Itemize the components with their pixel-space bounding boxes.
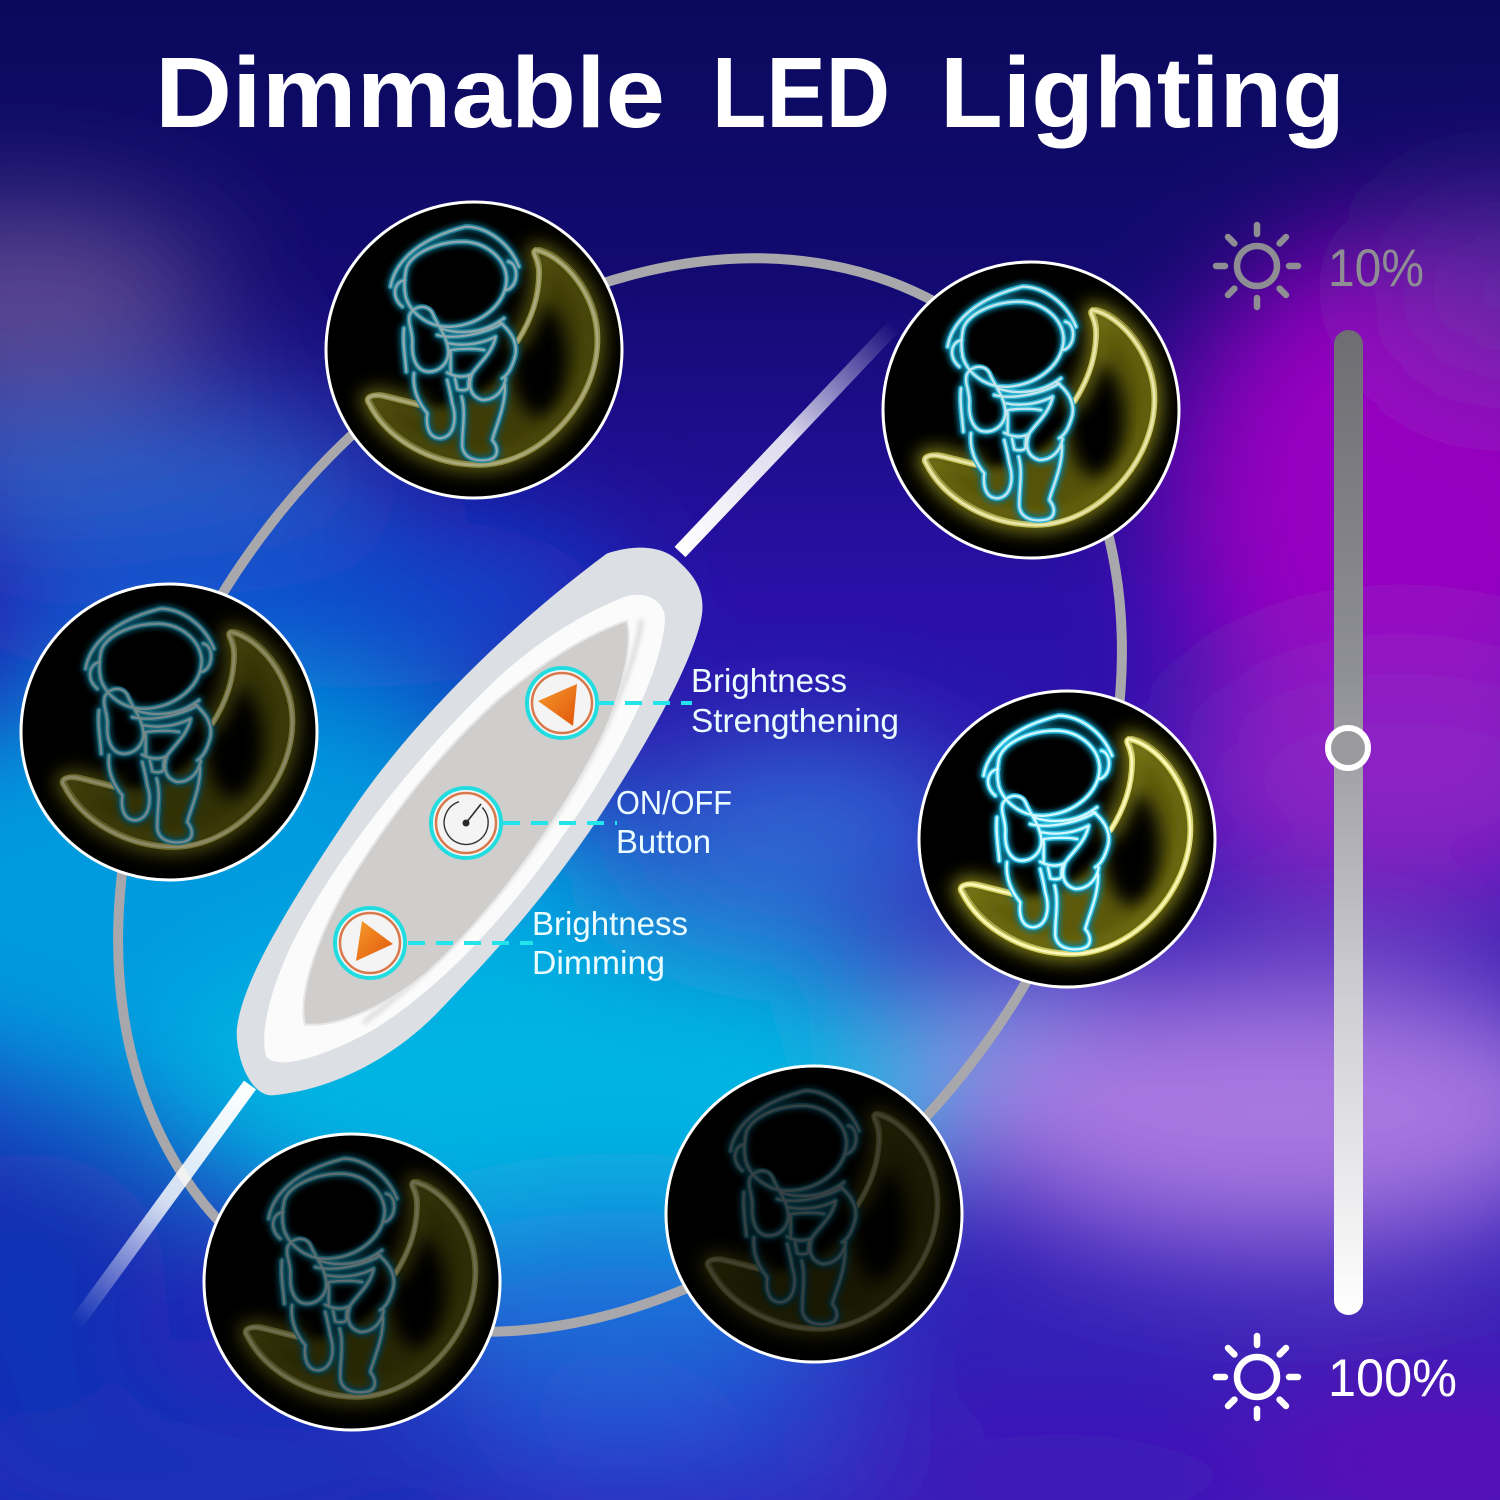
label: brightness strengthening: Strengthening — [691, 702, 899, 739]
icon: bright sun — [1216, 1336, 1298, 1418]
neon sign upper right circle — [883, 262, 1179, 558]
title: LED — [712, 37, 890, 149]
neon sign full brightness circle — [919, 691, 1215, 987]
title: Lighting — [940, 37, 1345, 149]
cable — [75, 325, 895, 1325]
label: 10 percent: 10% — [1328, 239, 1424, 298]
button: on off — [431, 788, 501, 858]
neon sign dimmest circle — [666, 1066, 962, 1362]
button: brightness strengthening — [527, 668, 597, 738]
icon: dim sun — [1216, 225, 1298, 307]
label: brightness dimming: Brightness — [532, 905, 688, 942]
label: on off button: ON/OFF — [616, 784, 732, 821]
brightness slider — [1328, 330, 1368, 1315]
neon sign lower left circle — [204, 1134, 500, 1430]
neon sign upper left circle — [326, 202, 622, 498]
button: brightness dimming — [335, 908, 405, 978]
callout lines — [408, 703, 692, 943]
title: Dimmable — [155, 37, 665, 149]
label: 100 percent: 100% — [1328, 1349, 1457, 1408]
label: brightness dimming: Dimming — [532, 944, 665, 981]
label: brightness strengthening: Brightness — [691, 662, 847, 699]
dimmer controller — [237, 548, 702, 1095]
neon sign left circle — [21, 584, 317, 880]
label: on off button: Button — [616, 823, 711, 860]
slider knob — [1328, 728, 1368, 768]
